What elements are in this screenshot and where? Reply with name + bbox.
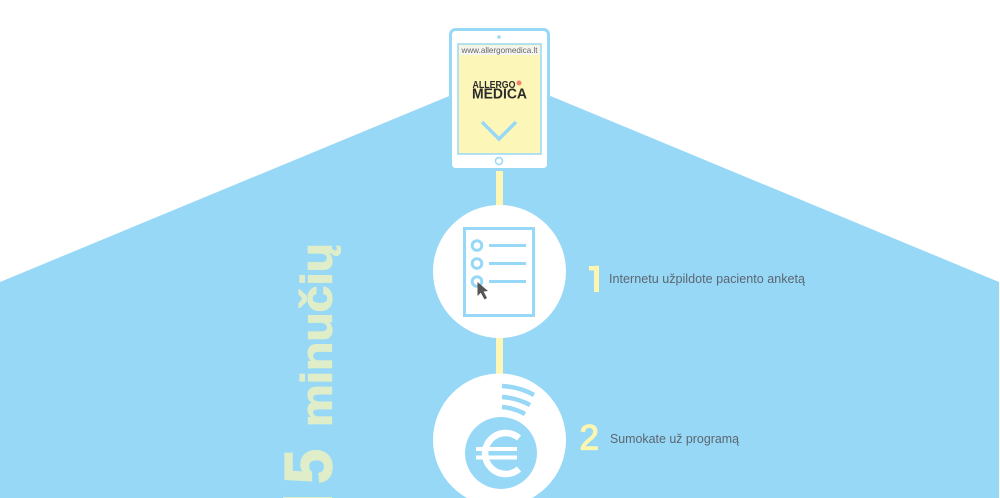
- label: step 2 number: 2: [580, 418, 599, 458]
- label: step 2 text: Sumokate už programą: [610, 431, 740, 446]
- icon: tablet: [450, 30, 548, 170]
- connector: step 1 to step 2: [496, 336, 503, 376]
- icon: chevron down: [482, 122, 516, 139]
- icon: home button: [496, 158, 502, 164]
- connector: tablet to step 1: [496, 168, 503, 208]
- icon: questionnaire: [464, 228, 534, 316]
- icon: mouse cursor: [478, 282, 488, 300]
- url text: www.allergomedica.lt: [461, 46, 538, 55]
- label: step 1 number: [589, 266, 599, 292]
- heading: rotated 15 minučių: minučių: [292, 243, 342, 427]
- label: step 1 number: 1: [586, 259, 607, 301]
- logo: Allergo Medica: ALLERGO: [472, 79, 516, 91]
- label: step 1 text: Internetu užpildote paciento anketą: [609, 271, 806, 286]
- logo: Allergo Medica: MEDICA: [472, 86, 527, 102]
- heading: rotated 15 minučių: 5: [272, 449, 346, 484]
- step 1 circle with form icon: [433, 205, 566, 338]
- heading: rotated 15 minučių: [272, 243, 346, 498]
- logo: Allergo Medica: [472, 79, 527, 102]
- icon: euro coin: [465, 417, 537, 489]
- icon: contactless waves: [502, 386, 534, 414]
- step 2 circle with euro icon: [433, 374, 566, 498]
